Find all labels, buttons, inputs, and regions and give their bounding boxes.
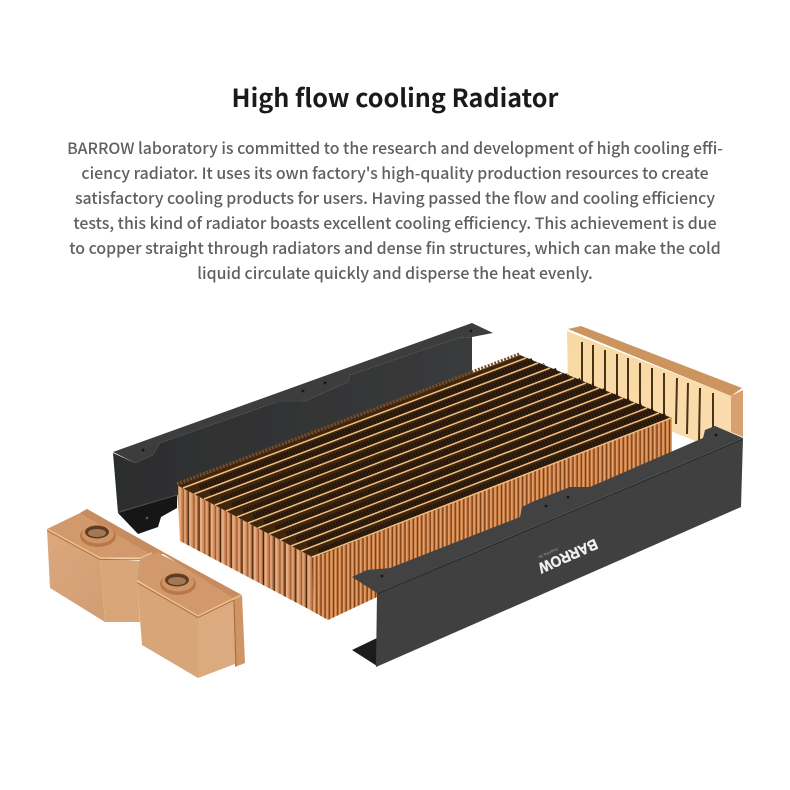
plate gold inner face with slots <box>567 331 731 447</box>
title: High flow cooling Radiator <box>232 79 558 115</box>
description text: to copper straight through radiators and dense fin structures, which can make the cold <box>69 236 721 259</box>
left cap rear ridge <box>80 509 165 557</box>
copper fin core <box>177 354 672 620</box>
description text: BARROW laboratory is committed to the research and development of high cooling effi- <box>67 136 723 158</box>
left cap facet <box>100 558 142 622</box>
bracket bottom flange <box>118 495 177 534</box>
mounting holes <box>142 330 472 519</box>
copper end caps <box>47 509 245 678</box>
left cap edge highlight <box>47 529 152 558</box>
right cap edge highlights <box>137 581 242 616</box>
description text: satisfactory cooling products for users. Having passed the flow and cooling efficiency <box>75 186 715 209</box>
right cap side face <box>198 599 235 678</box>
left cap front face <box>47 529 105 622</box>
right cap rear ridge <box>160 552 240 598</box>
BARROW logo: BARROW <box>535 535 600 576</box>
plate slots <box>582 342 713 441</box>
fins: top surface <box>177 355 672 557</box>
back mounting bracket <box>113 323 493 534</box>
right port <box>160 572 196 595</box>
right cap end strip <box>233 595 245 667</box>
right cap top face <box>137 553 242 616</box>
description text: ciency radiator. It uses its own factory's high-quality production resources to create <box>81 161 709 184</box>
bracket top flange <box>352 426 743 593</box>
description text <box>67 136 723 284</box>
fins: long side <box>312 418 672 620</box>
cap joint <box>137 552 160 580</box>
bracket bottom flange <box>352 638 377 666</box>
bracket wall <box>376 438 743 667</box>
plate top rim <box>568 326 742 396</box>
plate side <box>731 390 743 437</box>
fins: short end <box>177 485 314 612</box>
mounting holes <box>381 434 717 577</box>
right cap front face <box>137 581 198 678</box>
fin tooth texture <box>200 361 666 552</box>
copper tube highlights <box>183 358 671 557</box>
description text: tests, this kind of radiator boasts excellent cooling efficiency. This achievement is due <box>73 211 717 234</box>
bracket top flange <box>113 323 493 463</box>
BARROW logo: Dual-Ra.Jet <box>537 547 559 560</box>
front mounting bracket <box>352 426 743 667</box>
rear copper end plate <box>567 326 743 447</box>
left port <box>80 524 116 547</box>
back serrated edge <box>177 354 520 484</box>
bracket bend line <box>377 439 743 594</box>
bracket wall <box>113 337 472 513</box>
description text: liquid circulate quickly and disperse the heat evenly. <box>197 261 593 284</box>
left cap top face <box>47 509 160 558</box>
bracket bend highlight <box>119 495 177 512</box>
